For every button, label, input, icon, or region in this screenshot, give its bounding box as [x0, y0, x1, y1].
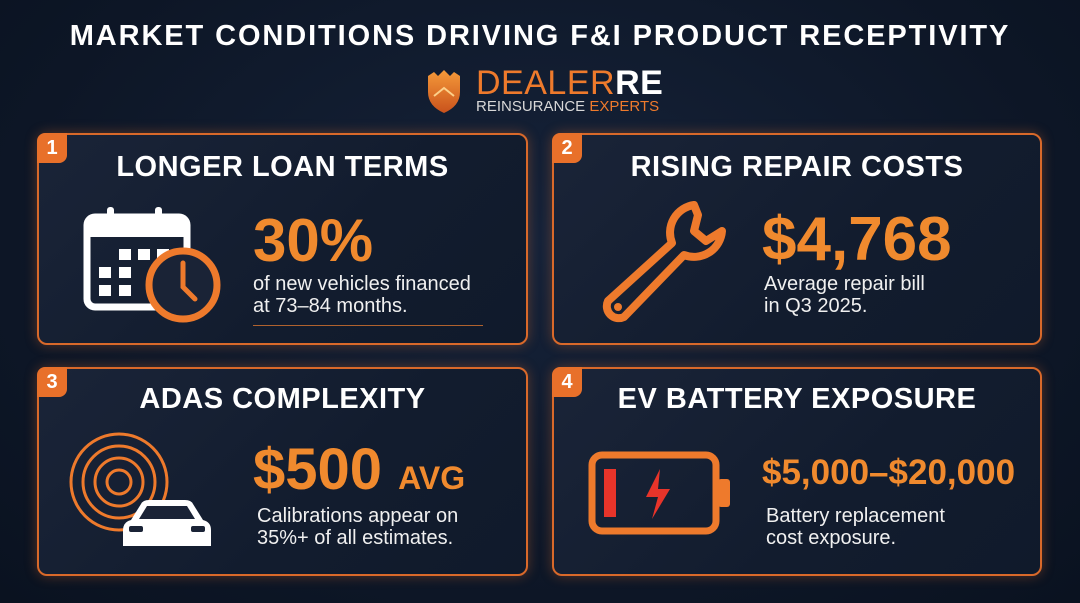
title: MARKET CONDITIONS DRIVING F&I PRODUCT RECEPTIVITY [70, 20, 1010, 52]
description: Battery replacement [766, 505, 945, 527]
stat: $4,768 [762, 205, 952, 274]
panel: adas complexity [37, 367, 528, 576]
description: Calibrations appear on [257, 505, 458, 527]
panel: longer loan terms: 1 [46, 137, 58, 159]
panel: ev battery exposure: 4 [561, 371, 573, 393]
description: of new vehicles financed [253, 273, 471, 295]
description: cost exposure. [766, 527, 896, 549]
panel: rising repair costs: 2 [561, 137, 573, 159]
stat: $500 AVG [253, 437, 465, 502]
logo: DEALERRE [476, 64, 663, 102]
description: 35%+ of all estimates. [257, 527, 453, 549]
panel: longer loan terms [37, 133, 528, 345]
description: in Q3 2025. [764, 295, 867, 317]
description: at 73–84 months. [253, 295, 408, 317]
stat: 30% [253, 207, 373, 274]
panel: ev battery exposure [552, 367, 1042, 576]
heading: ADAS COMPLEXITY [139, 383, 426, 415]
icon: battery [588, 452, 730, 534]
stat: $5,000–$20,000 [762, 453, 1015, 492]
description [257, 505, 458, 549]
description [253, 273, 471, 317]
heading: RISING REPAIR COSTS [631, 151, 963, 183]
panel: adas complexity: 3 [46, 371, 58, 393]
icon: calendar clock [84, 207, 220, 322]
description [764, 273, 925, 317]
description: Average repair bill [764, 273, 925, 295]
heading: EV BATTERY EXPOSURE [618, 383, 976, 415]
heading: LONGER LOAN TERMS [116, 151, 449, 183]
logo: REINSURANCE EXPERTS [476, 98, 659, 115]
icon: wrench [602, 201, 726, 322]
logo [428, 64, 663, 115]
icon: shield [428, 70, 460, 113]
panel: rising repair costs [552, 133, 1042, 345]
description [766, 505, 945, 549]
icon: radar car [70, 432, 211, 546]
